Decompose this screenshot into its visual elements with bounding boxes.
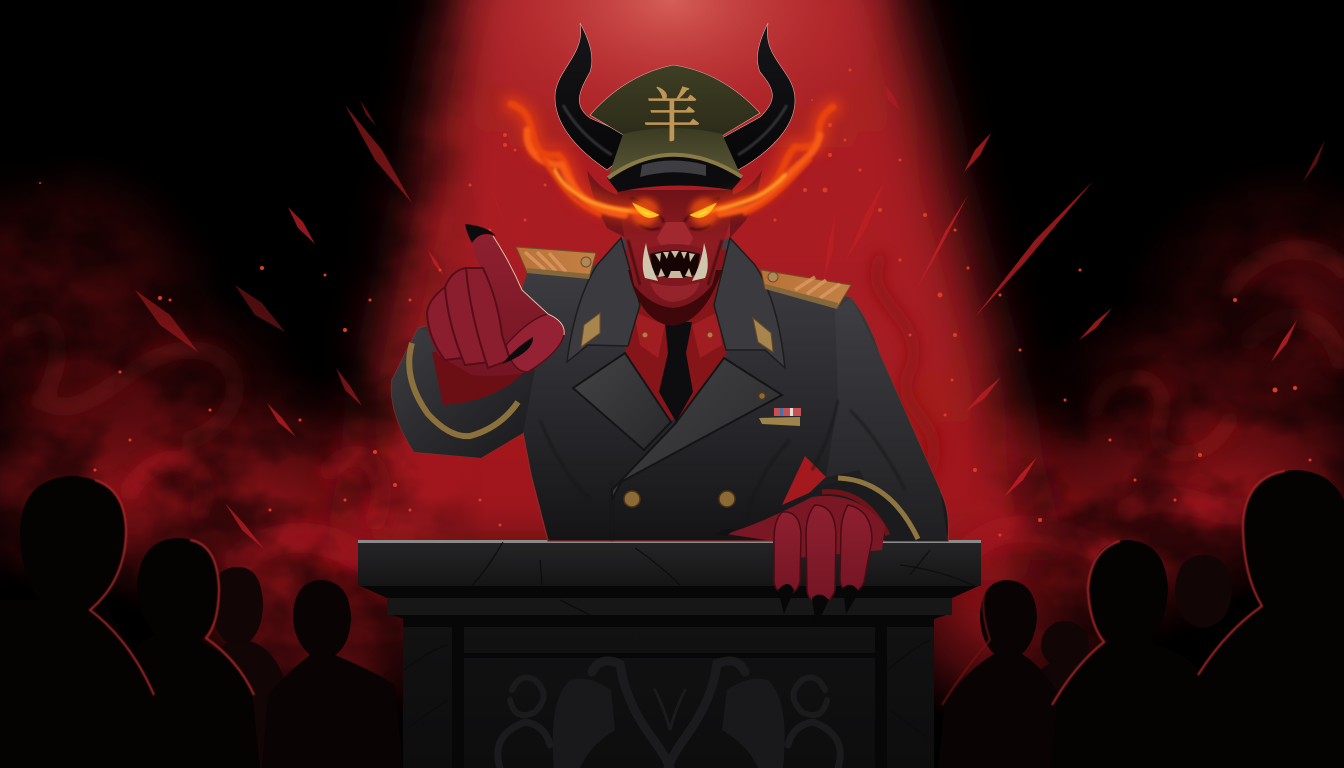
- background: red smoke haze: [0, 150, 1344, 730]
- jacket body and sleeves: [391, 238, 949, 541]
- teeth: [655, 251, 695, 278]
- ear right: [730, 170, 762, 238]
- shirt collar: [634, 312, 722, 358]
- silhouette: large front figure: [0, 476, 158, 768]
- tusks: [643, 243, 708, 281]
- finger rim light: [493, 236, 564, 335]
- officer cap: [590, 65, 760, 192]
- cap visor: [607, 156, 742, 192]
- podium top slab: [358, 541, 981, 586]
- red gap between torso and right arm: [782, 456, 826, 505]
- right epaulette: [761, 270, 851, 309]
- jacket collar left: [567, 238, 640, 362]
- fingers: [774, 505, 872, 604]
- demon head: [587, 170, 762, 326]
- background: red spotlight beam: [340, 0, 1050, 560]
- jacket collar right: [714, 238, 785, 368]
- background: flying red streaks: [135, 85, 1325, 549]
- slab highlight: [358, 540, 981, 543]
- claw: thumb: [502, 337, 533, 364]
- right lapel and coat overlap: [612, 358, 782, 500]
- podium: stone lectern: [358, 540, 981, 768]
- visor highlight: [640, 160, 706, 177]
- brow and cheek creases: [628, 198, 722, 285]
- silhouette: figure 2: [95, 538, 260, 768]
- claw: index finger: [465, 224, 496, 243]
- silhouette: figure 2 right: [1050, 540, 1210, 768]
- right cuff: [809, 478, 920, 541]
- cap emblem: 羊: [643, 84, 701, 149]
- background: glowing embers: [39, 68, 1312, 536]
- silhouette: figure near podium: [938, 580, 1068, 768]
- mouth: [650, 250, 700, 278]
- background: smoke mottling: [0, 72, 1344, 684]
- flame glow: [511, 104, 833, 212]
- cap gold strip: [608, 155, 742, 178]
- right sleeve shading: [826, 297, 948, 541]
- right flame: [705, 107, 833, 214]
- face: [617, 190, 733, 308]
- podium pedestal: [403, 617, 934, 768]
- silhouette: large right figure: [1192, 470, 1344, 768]
- right horn: [722, 23, 795, 170]
- silhouette: back left figure: [190, 567, 300, 768]
- medal ribbons: [759, 408, 801, 426]
- podium second tier: [358, 585, 981, 619]
- collar badge left: [581, 313, 600, 347]
- cap crown: [590, 65, 760, 136]
- curled fingers: [427, 268, 510, 368]
- thumb: [506, 314, 564, 372]
- lower lip and chin: [650, 282, 700, 302]
- upper lip: [644, 244, 706, 258]
- left sleeve shading: [391, 328, 535, 458]
- ear left: [587, 170, 626, 238]
- crowd: right silhouettes: [938, 470, 1344, 768]
- left cuff: gold band and red lining: [409, 343, 524, 436]
- right hand gripping podium: [716, 496, 885, 626]
- neck shadow: [628, 270, 722, 326]
- horns: [555, 23, 795, 170]
- nose: [657, 222, 693, 248]
- jacket fold lines: [540, 400, 905, 541]
- black tie: [659, 322, 693, 422]
- left horn: [555, 23, 628, 170]
- eye glow left: [631, 198, 659, 226]
- left lapel: [573, 353, 671, 450]
- eye glow right: [690, 198, 718, 226]
- silhouette: figure 4: [262, 580, 403, 768]
- background: smoke swirls: [20, 250, 1344, 570]
- podium frame columns: [403, 617, 934, 768]
- podium carved relief: [498, 661, 840, 768]
- red shirt: [622, 250, 732, 420]
- silhouette: back right figures: [1030, 555, 1232, 768]
- stone cracks: [404, 542, 975, 740]
- cap band: [608, 128, 742, 178]
- left flame: [511, 104, 645, 215]
- collar badge right: [753, 318, 773, 352]
- back of hand: [726, 496, 885, 560]
- coat buttons: [624, 392, 766, 507]
- left pointing hand: [426, 224, 564, 376]
- flames from eyes: [511, 104, 833, 226]
- crowd: left silhouettes: [0, 476, 403, 768]
- left epaulette: [516, 247, 596, 279]
- demon officer figure: [391, 224, 949, 626]
- claws: [778, 584, 859, 626]
